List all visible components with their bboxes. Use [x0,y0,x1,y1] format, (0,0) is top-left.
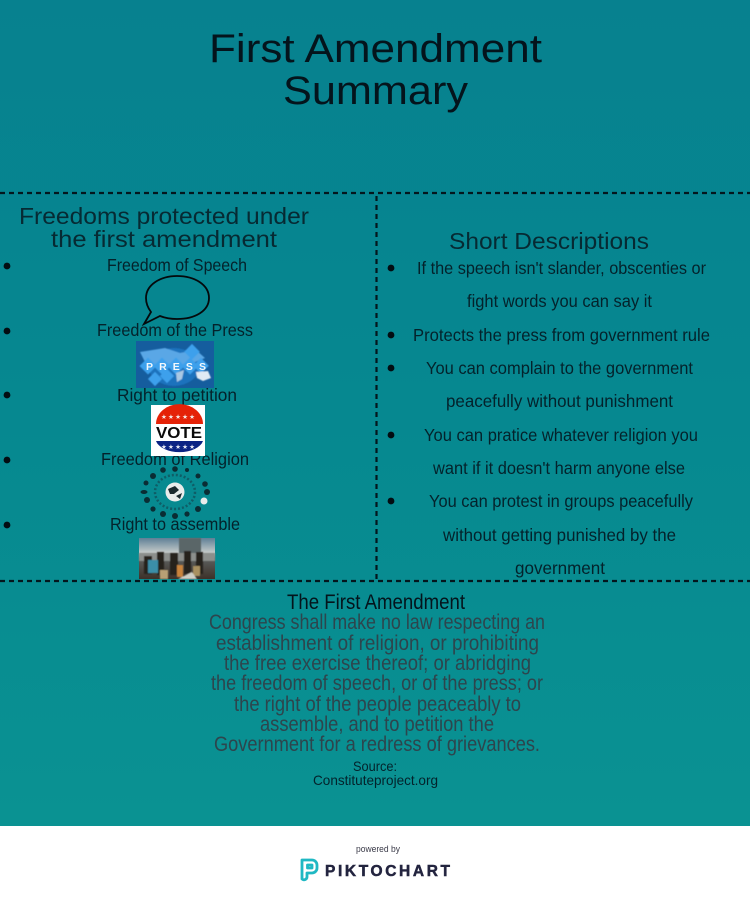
icon: press map: PRESS [146,361,206,373]
title: First Amendment [209,27,542,71]
list: descriptions: government [515,558,605,578]
text block: amendment text: the free exercise thereof; or abridging [224,651,531,675]
list: descriptions: You can protest in groups peacefully [429,491,693,511]
icon: vote badge [151,404,205,456]
panel: freedoms protected [4,203,309,579]
icon: speech bubble [144,276,209,324]
list: descriptions [388,258,710,578]
text block: amendment text: the freedom of speech, or of the press; or [211,671,543,695]
source: Constituteproject.org [313,772,438,788]
text block: amendment text: Government for a redress of grievances. [214,732,540,756]
list: freedoms: Freedom of the Press [97,320,253,340]
list: descriptions: want if it doesn't harm anyone else [432,458,685,478]
list: freedoms: Freedom of Speech [107,255,247,275]
panel: the first amendment [209,591,545,788]
title [209,27,542,113]
logo wordmark: PIKTOCHART [325,863,451,880]
panel: short descriptions [388,228,710,578]
list: freedoms: Right to petition [117,385,237,405]
source: Source: [353,758,397,774]
title: Summary [283,69,468,113]
icon: piktochart logo [302,860,317,880]
footer: powered by piktochart [0,826,750,900]
icon: religion symbols ring [140,466,210,519]
text block: amendment text: assemble, and to petition the [260,712,494,736]
list: descriptions: You can pratice whatever religion you [424,425,698,445]
list: descriptions: without getting punished by the [442,525,676,545]
list: descriptions: Protects the press from government rule [413,325,710,345]
heading: freedoms protected: the first amendment [51,226,278,252]
list: descriptions: You can complain to the government [426,358,693,378]
icon: press map [136,341,214,388]
heading: freedoms protected: Freedoms protected under [19,203,309,229]
heading: short descriptions: Short Descriptions [449,228,649,254]
icon: vote badge: VOTE [156,425,202,442]
icon: vote badge: ★★★★★ [161,443,195,451]
list: descriptions: fight words you can say it [467,291,652,311]
heading: freedoms protected [19,203,309,252]
source [313,758,438,788]
powered by label: powered by [356,844,400,854]
text block: amendment text: establishment of religion, or prohibiting [216,631,539,655]
list: descriptions: peacefully without punishment [446,391,673,411]
text block: amendment text: Congress shall make no law respecting an [209,610,545,634]
image: protest crowd [139,538,215,579]
list: descriptions: If the speech isn't slander, obscenties or [417,258,706,278]
text block: amendment text [209,610,545,756]
icon: vote badge: ★★★★★ [161,413,195,421]
list: freedoms: Right to assemble [110,514,240,534]
heading: the first amendment: The First Amendment [287,591,465,614]
text block: amendment text: the right of the people peaceably to [234,692,521,716]
list: freedoms [4,255,253,534]
list: freedoms: Freedom of Religion [101,449,249,469]
